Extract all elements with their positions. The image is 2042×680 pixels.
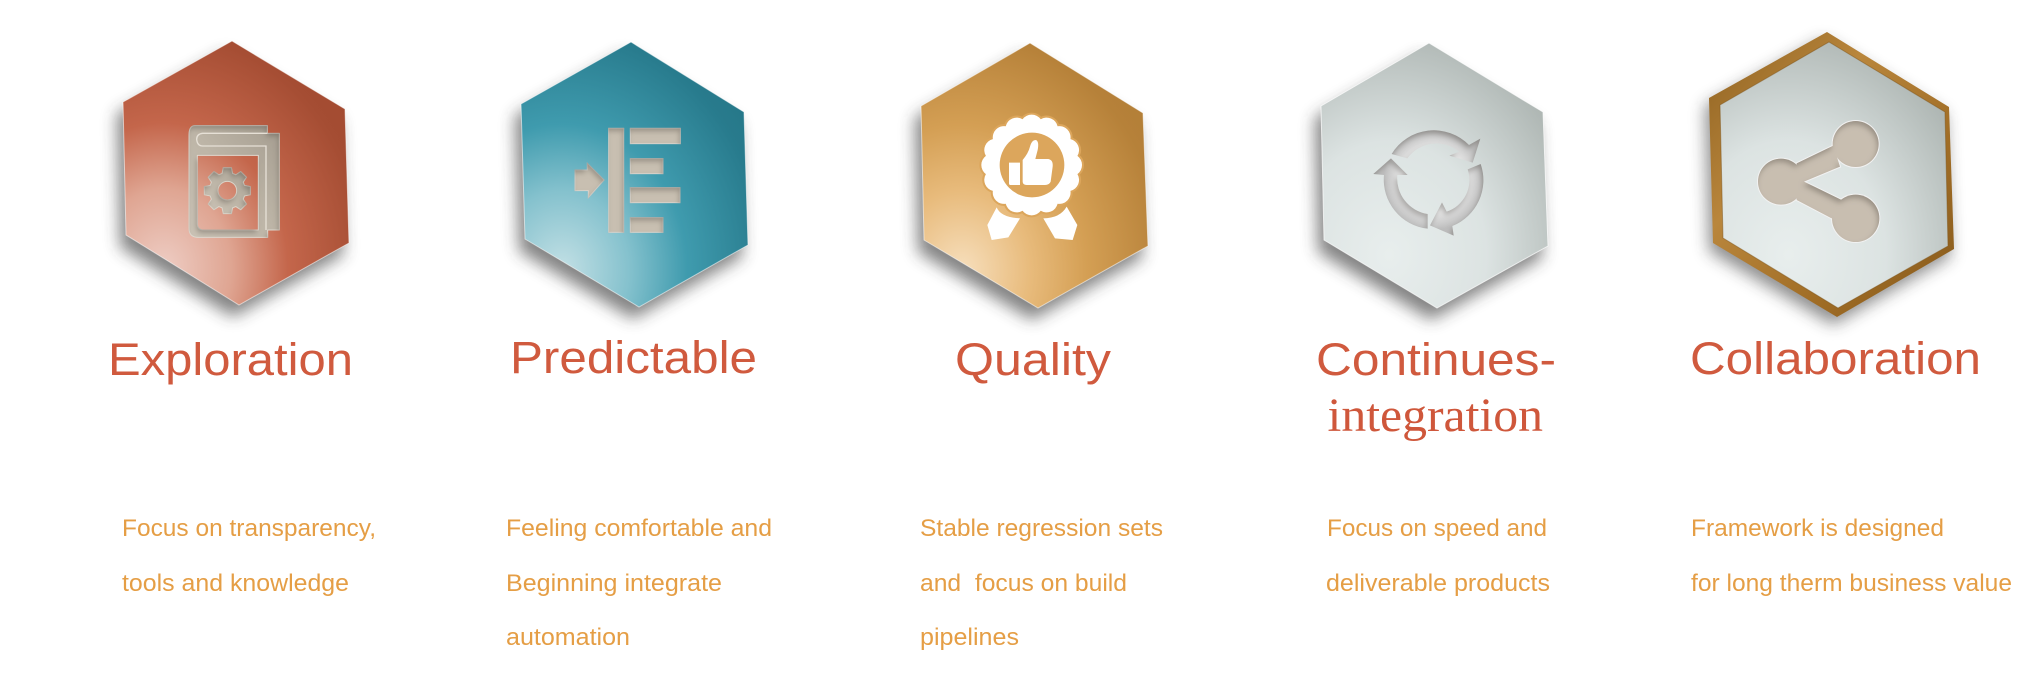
- description: Predictable: Feeling comfortable and: [506, 515, 772, 542]
- icon: share: [1758, 121, 1879, 242]
- description: Continues-integration: deliverable products: [1326, 570, 1550, 597]
- hexagon: silver: [1315, 43, 1548, 320]
- title: Continues-integration: [1316, 334, 1556, 442]
- hexagon: red: [117, 41, 349, 317]
- description: Quality: [920, 515, 1163, 651]
- description: Collaboration: for long therm business value: [1691, 570, 2012, 597]
- title: Predictable: Predictable: [510, 332, 757, 383]
- icon: circular arrows: [1373, 130, 1483, 236]
- description: Continues-integration: [1326, 515, 1550, 597]
- description: Quality: Stable regression sets: [920, 515, 1163, 542]
- hexagon: teal: [515, 42, 748, 319]
- description: Predictable: automation: [506, 624, 630, 651]
- title: Collaboration: Collaboration: [1690, 333, 1981, 384]
- description: Exploration: Focus on transparency,: [122, 515, 376, 542]
- description: Quality: and focus on build: [920, 570, 1127, 597]
- description: Exploration: [122, 515, 376, 597]
- title: Continues-integration: Continues-: [1316, 334, 1556, 385]
- column: Exploration: [108, 41, 376, 597]
- icon: indent list with arrow: [575, 128, 680, 232]
- description: Predictable: Beginning integrate: [506, 570, 722, 597]
- hexagon: silver with gold frame: [1705, 32, 1954, 325]
- column: Predictable: [506, 42, 772, 651]
- description: Continues-integration: Focus on speed and: [1327, 515, 1547, 542]
- description: Exploration: tools and knowledge: [122, 570, 349, 597]
- icon: book with gear: [189, 126, 279, 237]
- column: Collaboration: [1690, 32, 2012, 597]
- description: Predictable: [506, 515, 772, 651]
- title: Exploration: Exploration: [108, 334, 353, 385]
- hexagon: gold: [915, 43, 1148, 320]
- column: Quality: [915, 43, 1163, 651]
- column: Continues-integration: [1315, 43, 1556, 597]
- title: Continues-integration: integration: [1328, 389, 1543, 442]
- description: Collaboration: Framework is designed: [1691, 515, 1944, 542]
- description: Quality: pipelines: [920, 624, 1019, 651]
- description: Collaboration: [1691, 515, 2012, 597]
- icon: rosette with thumbs up: [981, 115, 1082, 240]
- title: Quality: Quality: [955, 334, 1112, 385]
